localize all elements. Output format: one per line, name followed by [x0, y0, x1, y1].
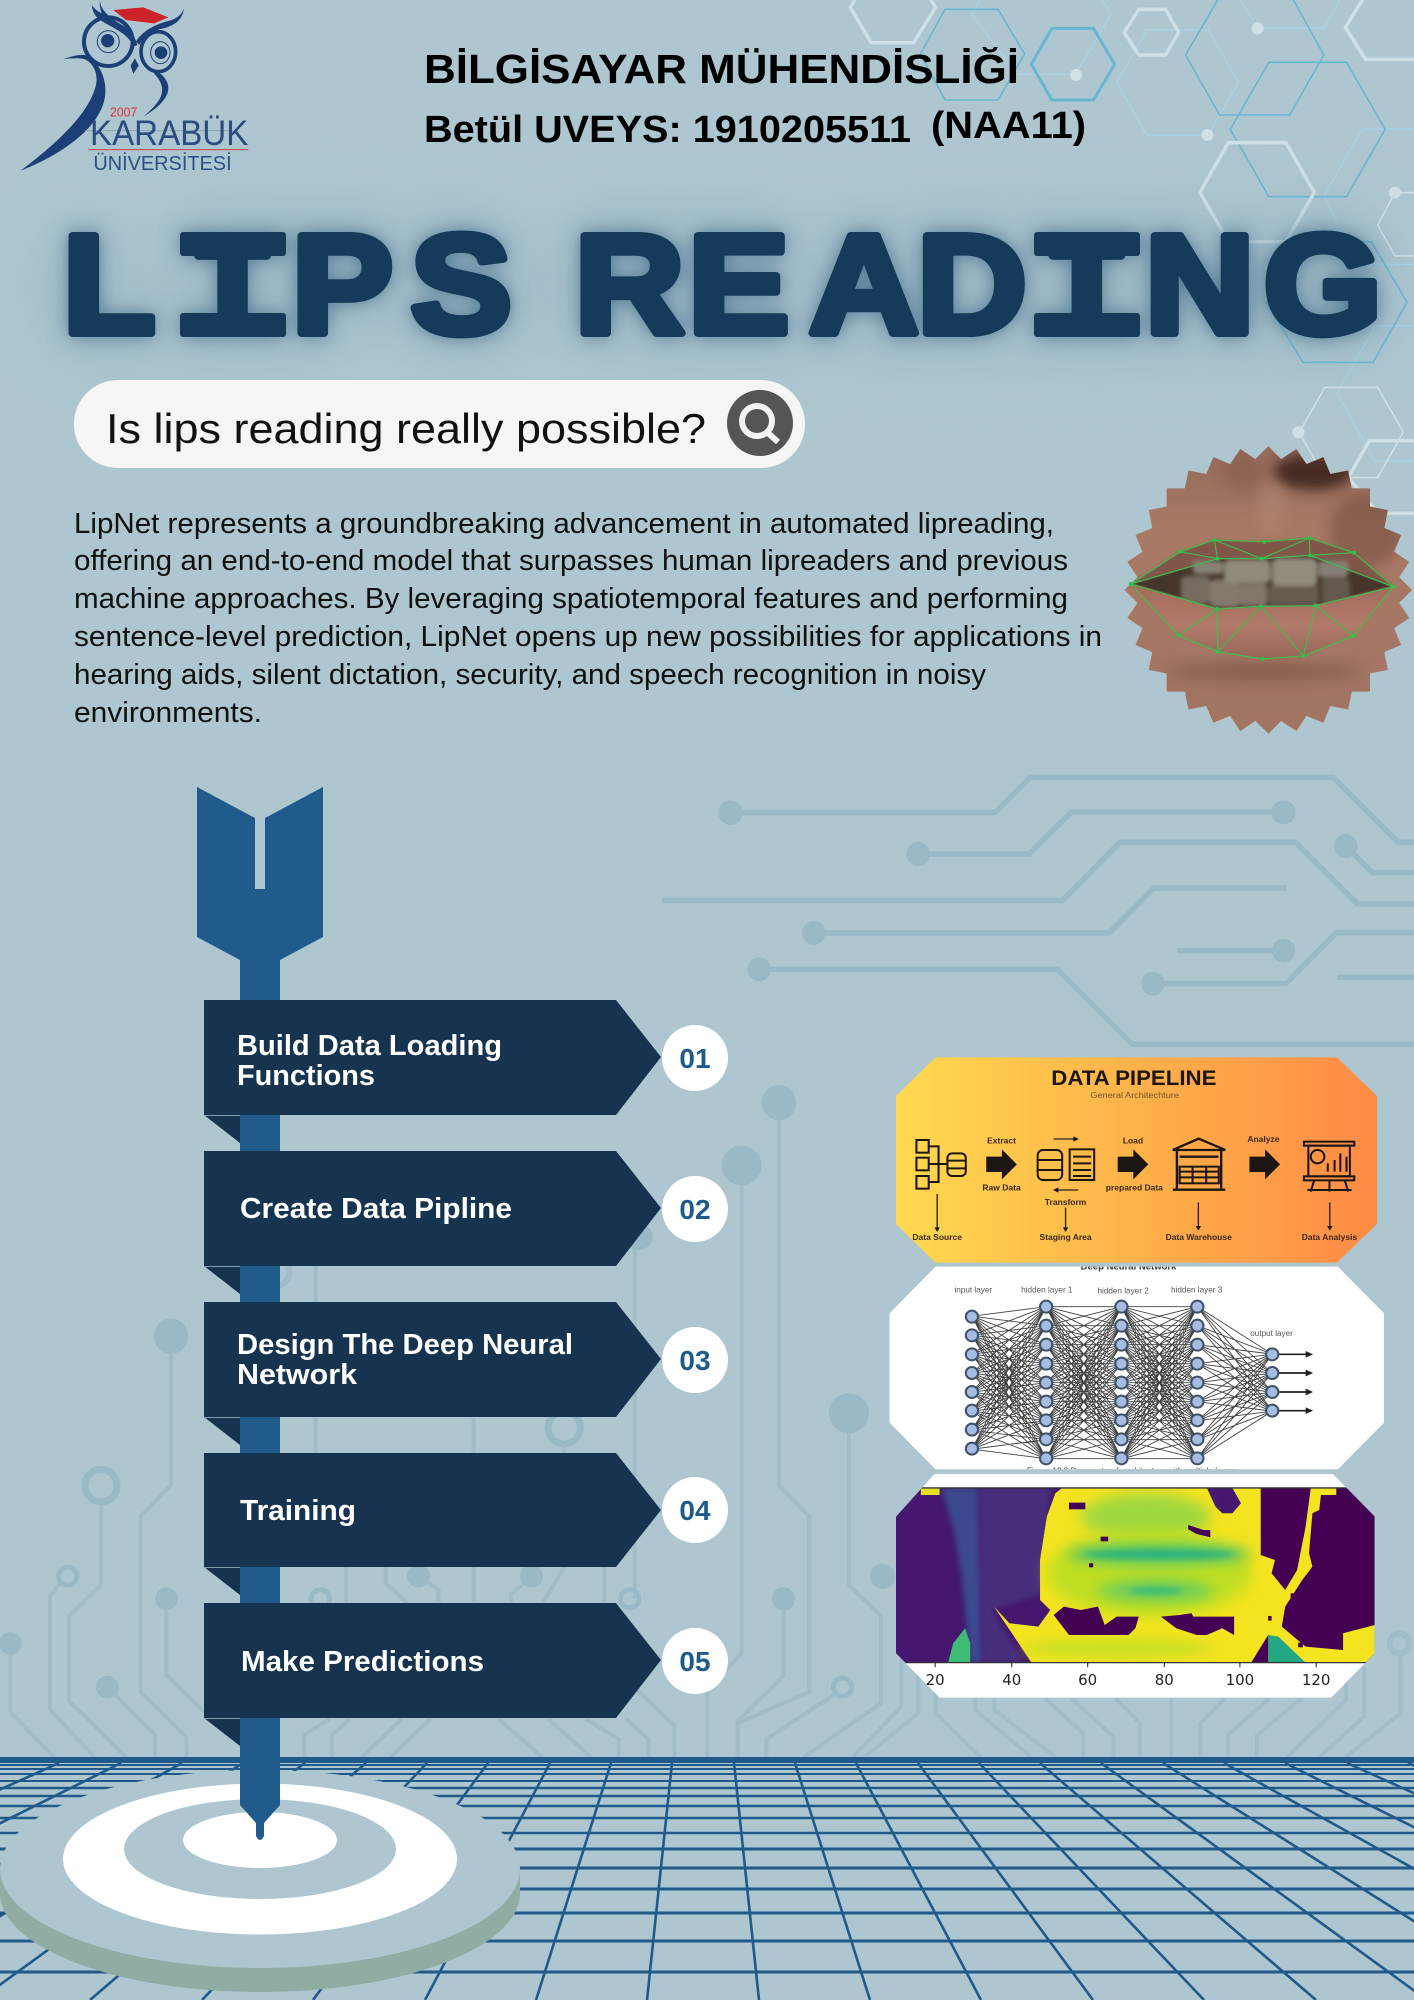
search bar	[74, 380, 805, 468]
intro paragraph: offering an end-to-end model that surpasses human lipreaders and previous	[74, 545, 1068, 577]
pipeline labels: Data Warehouse	[1166, 1232, 1232, 1242]
intro paragraph: hearing aids, silent dictation, security, and speech recognition in noisy	[74, 659, 986, 691]
circuit pattern upper right	[662, 777, 1414, 1044]
step 2: Create Data Pipline	[240, 1193, 512, 1225]
graduation cap	[113, 7, 168, 23]
heading: student name and number: Betül UVEYS: 1910205511	[424, 109, 911, 151]
intro paragraph: environments.	[74, 697, 262, 729]
pipeline arrowheads	[934, 1136, 1333, 1232]
icon: magnifier	[727, 390, 793, 456]
heatmap axis: 40	[1002, 1672, 1021, 1689]
pipeline title: DATA PIPELINE	[1051, 1065, 1216, 1090]
step 2	[204, 1151, 728, 1294]
step 4: Training	[240, 1495, 356, 1527]
landmark mesh	[1129, 536, 1395, 661]
circuit pattern lower left	[0, 1085, 895, 1757]
output arrowheads	[1306, 1351, 1313, 1414]
main title: L	[63, 206, 156, 364]
heading: group code: (NAA11)	[931, 105, 1086, 147]
pipeline labels: Raw Data	[982, 1183, 1021, 1193]
step 3: Design The Deep Neural	[237, 1329, 573, 1361]
upper lip	[1131, 538, 1393, 587]
step 1	[204, 1000, 728, 1143]
circuit pattern lower right	[853, 1633, 1409, 1757]
main title: PS READ	[292, 206, 1027, 364]
logo: Karabük University owl	[21, 0, 248, 175]
heatmap axis: 80	[1155, 1672, 1174, 1689]
green-yellow midtones	[1081, 1493, 1210, 1540]
step 3: Network	[237, 1359, 358, 1391]
pipeline block arrows	[986, 1149, 1280, 1179]
pipeline labels: prepared Data	[1106, 1183, 1163, 1193]
network connections	[972, 1307, 1272, 1459]
green corners	[948, 1628, 970, 1663]
intro paragraph: LipNet represents a groundbreaking advancement in automated lipreading,	[74, 508, 1054, 540]
main title: I	[187, 217, 278, 376]
heatmap axis: 120	[1302, 1672, 1330, 1689]
pipeline labels	[912, 1134, 1357, 1242]
network clipped captions: Deep Neural Network	[1081, 1260, 1177, 1271]
network nodes	[966, 1301, 1278, 1464]
step 5: 05	[679, 1646, 711, 1677]
target	[0, 1770, 520, 1992]
dark islands	[1054, 1503, 1306, 1647]
lower lip	[1131, 584, 1393, 659]
pipeline labels: Data Source	[912, 1232, 962, 1242]
layer labels: hidden layer 3	[1171, 1286, 1223, 1295]
main title: I	[1041, 217, 1133, 376]
pipeline subtitle: General Architechture	[1090, 1090, 1179, 1100]
owl body and crest	[21, 0, 184, 171]
heatmap axis	[926, 1663, 1330, 1689]
heatmap axis: 100	[1226, 1672, 1254, 1689]
heatmap axis: 20	[926, 1672, 945, 1689]
step 5: Make Predictions	[241, 1646, 484, 1678]
pipeline labels: Analyze	[1247, 1134, 1280, 1144]
pipeline labels: Staging Area	[1040, 1232, 1092, 1242]
search bar: Is lips reading really possible?	[106, 405, 706, 452]
hexagon decoration	[850, 0, 1414, 513]
pipeline labels: Data Analysis	[1302, 1232, 1357, 1242]
network clipped captions: Figure 12.2 Deep network architecture with multiple layers	[1027, 1466, 1237, 1475]
layer labels	[954, 1286, 1293, 1338]
pipeline labels: Extract	[987, 1135, 1016, 1145]
output arrows	[1278, 1354, 1307, 1411]
logo wordmark	[85, 106, 248, 175]
main title	[63, 206, 1382, 376]
arrow	[197, 787, 323, 1840]
teeth	[1181, 558, 1350, 607]
step 4: 04	[679, 1495, 711, 1526]
pipeline icons	[916, 1139, 1354, 1192]
step 3	[204, 1302, 728, 1445]
step 5	[204, 1603, 728, 1746]
intro paragraph	[74, 508, 1102, 729]
pipeline labels: Load	[1123, 1135, 1143, 1145]
step 4	[204, 1453, 728, 1595]
mouth interior	[1131, 555, 1393, 609]
neural network image	[890, 1260, 1384, 1475]
owl eyes	[84, 17, 176, 72]
heatmap plot	[894, 1488, 1377, 1663]
main title: NG	[1145, 206, 1382, 364]
intro paragraph: machine approaches. By leveraging spatiotemporal features and performing	[74, 583, 1068, 615]
step 3: 03	[679, 1345, 711, 1376]
heading: department: BİLGİSAYAR MÜHENDİSLİĞİ	[424, 46, 1019, 92]
logo wordmark: 2007	[110, 106, 137, 120]
layer labels: hidden layer 2	[1097, 1286, 1149, 1295]
logo wordmark: ÜNİVERSİTESİ	[93, 152, 232, 175]
data pipeline image	[896, 1057, 1377, 1263]
pipeline thin arrows	[937, 1139, 1330, 1228]
step 2: 02	[679, 1194, 711, 1225]
perspective floor grid	[0, 1757, 1414, 2000]
heatmap image	[894, 1474, 1377, 1698]
layer labels: output layer	[1250, 1329, 1293, 1338]
step 1: 01	[679, 1043, 711, 1074]
lips photo badge with landmark mesh	[1113, 443, 1414, 737]
yellow face region	[994, 1488, 1375, 1663]
lip bands	[1067, 1544, 1251, 1564]
logo wordmark: KARABÜK	[90, 114, 248, 153]
step 1: Build Data Loading	[237, 1030, 502, 1062]
intro paragraph: sentence-level prediction, LipNet opens up new possibilities for applications in	[74, 621, 1102, 653]
layer labels: hidden layer 1	[1021, 1286, 1073, 1295]
step 1: Functions	[237, 1060, 375, 1092]
heatmap axis: 60	[1078, 1672, 1097, 1689]
network clipped captions	[1027, 1260, 1237, 1475]
pipeline labels: Transform	[1045, 1197, 1086, 1207]
layer labels: input layer	[954, 1286, 992, 1295]
